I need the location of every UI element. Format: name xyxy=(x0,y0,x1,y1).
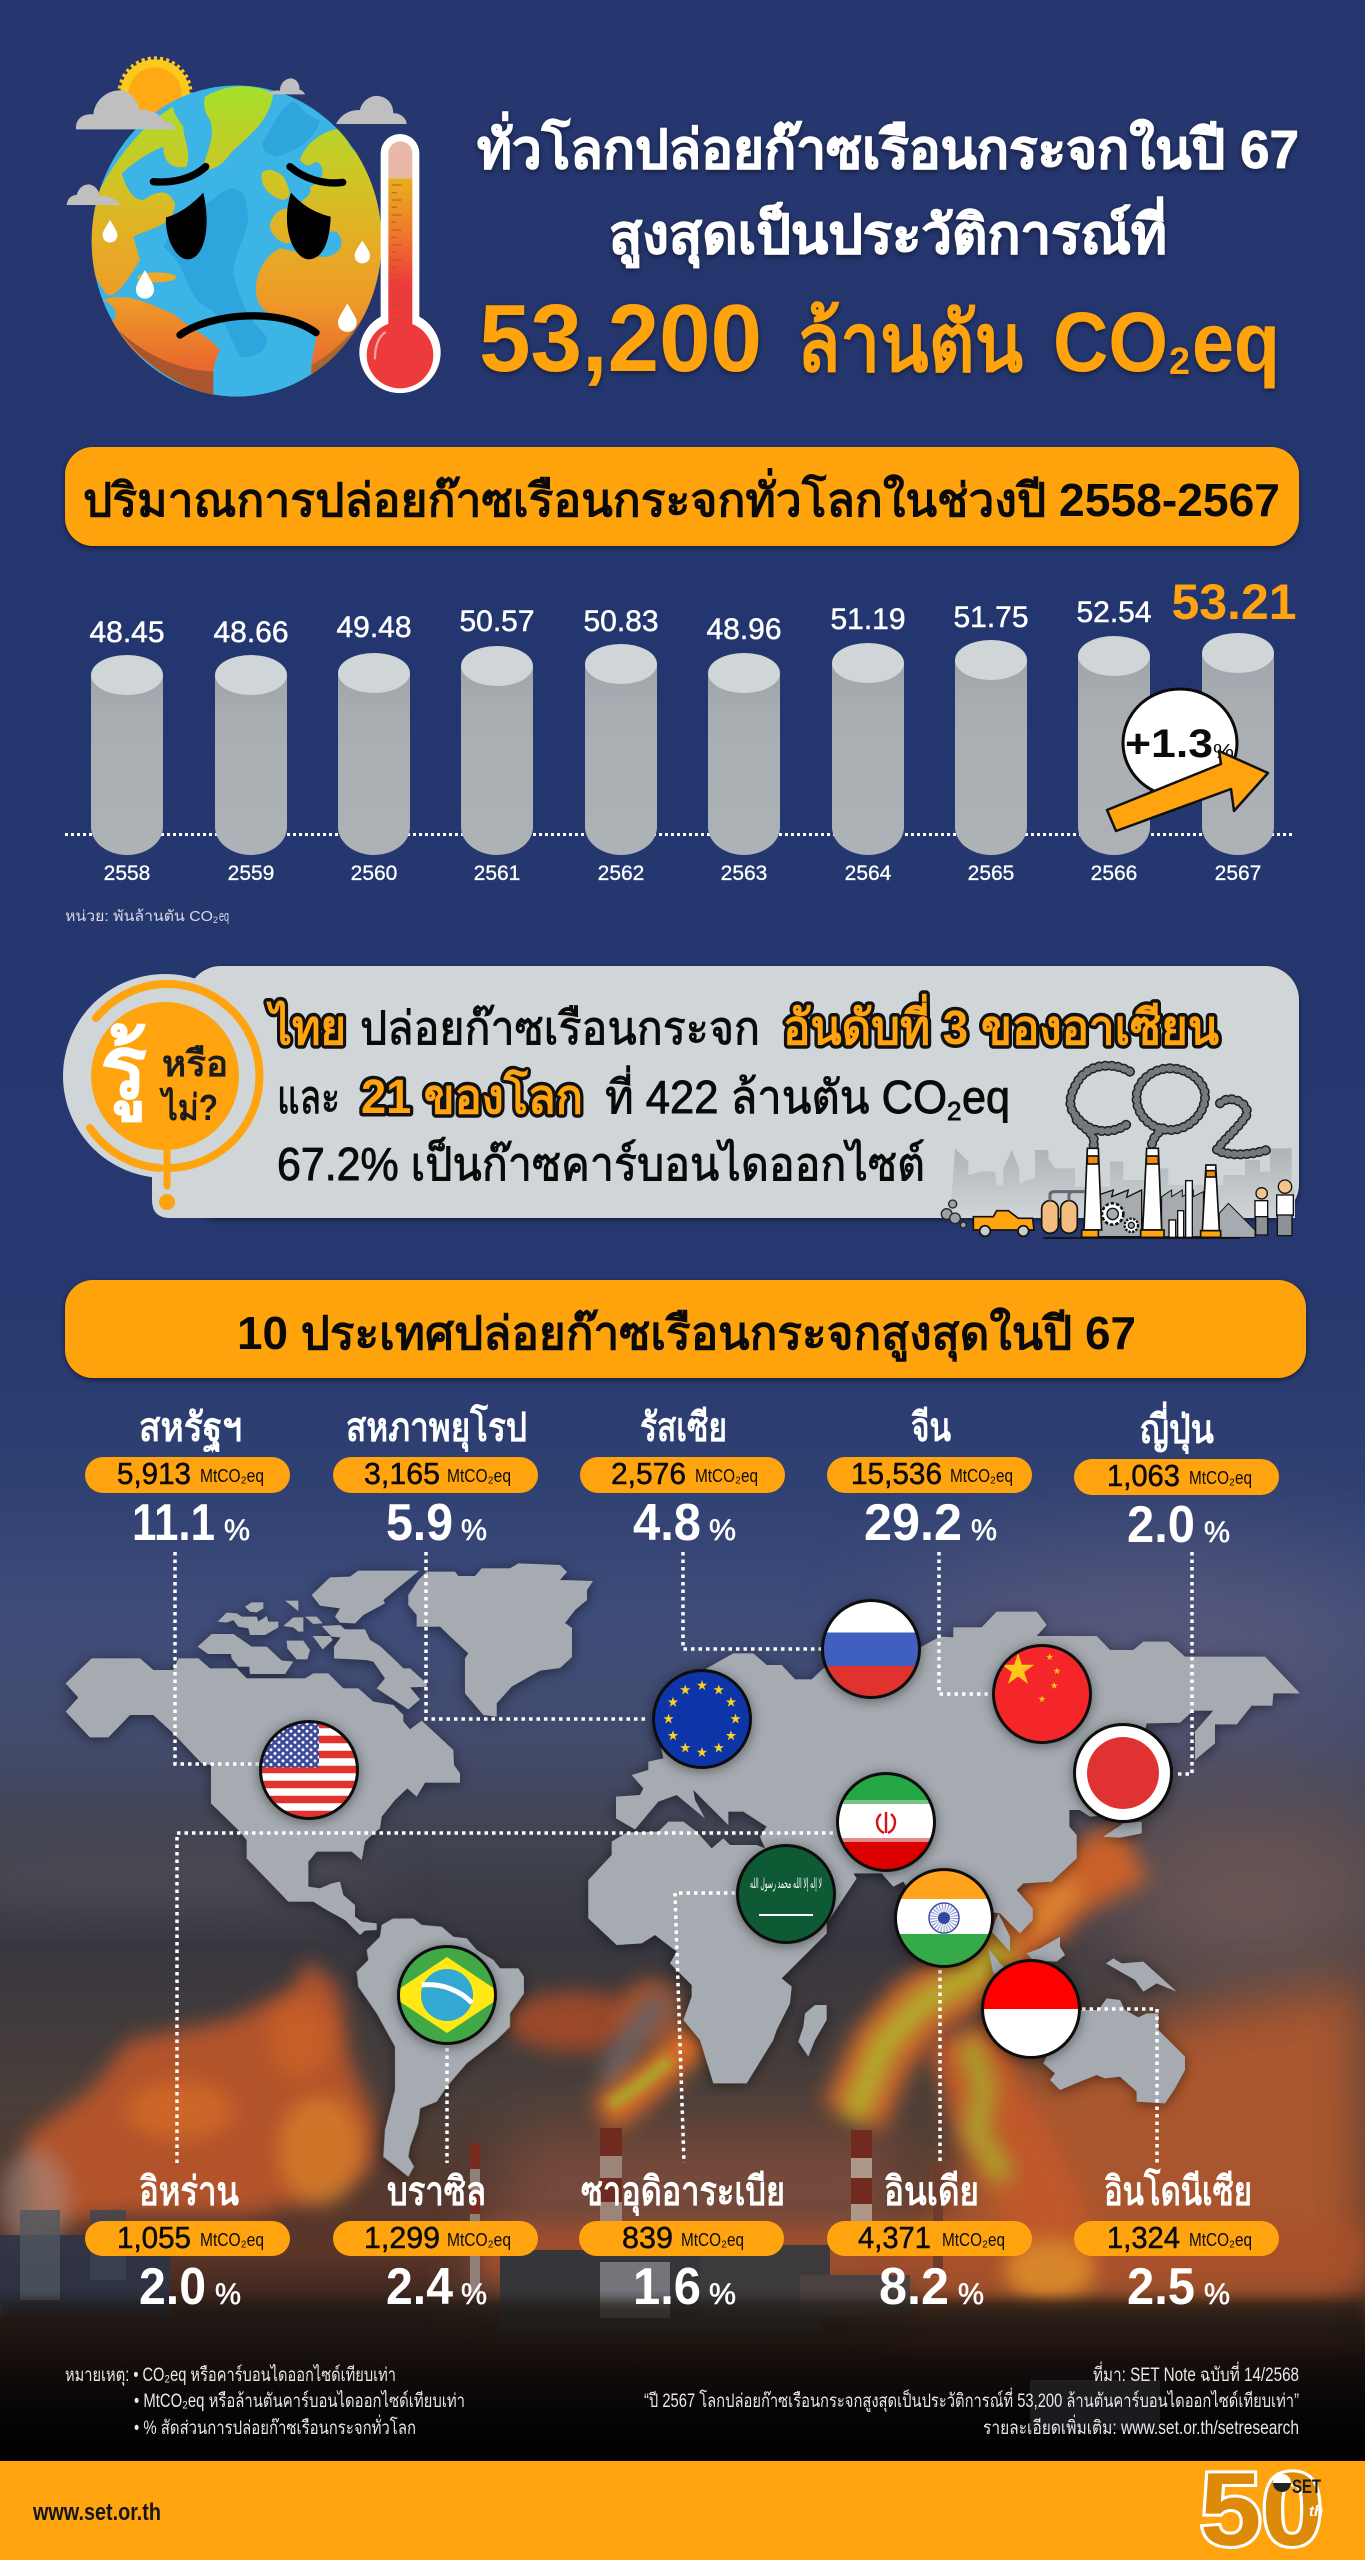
flag: Brazil xyxy=(397,1945,497,2045)
icon: sad earth with sun, clouds and thermometer xyxy=(67,59,441,397)
headline figure: 53,200 million tons CO2eq xyxy=(479,285,1280,392)
country: European Union: สหภาพยุโรป xyxy=(346,1404,527,1453)
text: Thailand ranking xyxy=(265,993,1219,1190)
text: Thailand ranking: ปล่อยก๊าซเรือนกระจก xyxy=(360,1002,760,1054)
country: United States: MtCO₂eq xyxy=(200,1466,264,1486)
country: India: % xyxy=(958,2278,984,2311)
country: European Union: 5.9 xyxy=(386,1494,453,1552)
bar chart: global emissions by year xyxy=(65,574,1297,885)
map: Australia xyxy=(1043,1998,1185,2103)
country: Brazil: % xyxy=(461,2278,487,2311)
country: Iran: 2.0 xyxy=(139,2258,206,2316)
flag: China xyxy=(994,1646,1090,1742)
notes: definitions: • % สัดส่วนการปล่อยก๊าซเรือนกระจกทั่วโลก xyxy=(134,2414,416,2439)
flag: Japan xyxy=(1074,1724,1172,1822)
chimneys and factory silhouettes in background photo xyxy=(0,2128,1365,2461)
map: North America and Greenland xyxy=(66,1563,593,1935)
flag: Indonesia xyxy=(981,1959,1081,2059)
country: United States: สหรัฐฯ xyxy=(139,1406,242,1454)
bar 2562: 2562 xyxy=(598,862,644,885)
flag: India xyxy=(894,1868,994,1968)
flag: United States xyxy=(259,1720,359,1820)
country: Iran: อิหร่าน xyxy=(139,2170,239,2214)
text: Thailand ranking: 2 xyxy=(947,1096,961,1126)
bar 2563: 2563 xyxy=(721,862,767,885)
world map xyxy=(66,1563,1300,2177)
flag: European Union xyxy=(654,1670,750,1768)
bar 2561: 2561 xyxy=(474,862,520,885)
country: European Union: % xyxy=(461,1514,487,1547)
text: Thailand ranking: eq xyxy=(962,1071,1010,1123)
dotted leader lines xyxy=(175,1552,1192,2163)
country: Japan xyxy=(1074,1401,1279,1554)
country: Indonesia: 1,324 xyxy=(1107,2220,1180,2255)
country: European Union: 3,165 xyxy=(364,1456,440,1491)
country: Indonesia xyxy=(1074,2168,1279,2316)
flag: Iran xyxy=(836,1772,936,1872)
country: United States xyxy=(85,1406,290,1552)
bar 2567: 53.21 xyxy=(1171,574,1297,630)
country: Russia: รัสเซีย xyxy=(640,1406,727,1450)
bar 2561 xyxy=(459,605,535,885)
icon: sad face xyxy=(103,167,370,335)
notes: source xyxy=(644,2361,1299,2439)
country: Japan: % xyxy=(1204,1516,1230,1549)
country: India: อินเดีย xyxy=(884,2170,979,2214)
bar 2566: 2566 xyxy=(1091,862,1137,885)
text: Thailand ranking: ไทย xyxy=(265,999,346,1055)
country: India xyxy=(827,2170,1032,2316)
country: United States: 5,913 xyxy=(117,1456,191,1491)
bar 2564 xyxy=(830,603,906,885)
text: Thailand ranking: ที่ 422 ล้านตัน CO xyxy=(605,1065,947,1123)
text: Thailand ranking: อันดับที่ 3 ของอาเซียน xyxy=(783,993,1219,1055)
country: Indonesia: อินโดนีเซีย xyxy=(1104,2168,1252,2214)
map: Asia-Pacific islands xyxy=(988,1822,1177,1992)
country: Russia xyxy=(580,1406,785,1552)
bar 2560: 2560 xyxy=(351,862,397,885)
unit note: eq xyxy=(219,908,229,925)
map: Eurasia and Africa xyxy=(588,1612,1300,2083)
unit note: 2 xyxy=(213,915,218,925)
country: Japan: MtCO₂eq xyxy=(1189,1468,1252,1488)
icon: factory with CO2 smoke xyxy=(941,1066,1295,1238)
country: Russia: 2,576 xyxy=(611,1456,686,1491)
bar 2559: 48.66 xyxy=(213,616,289,649)
icon: thermometer xyxy=(359,134,441,393)
notes: source: ที่มา: SET Note ฉบับที่ 14/2568 xyxy=(1093,2361,1299,2386)
country: Iran: % xyxy=(215,2278,241,2311)
badge: did you know magnifier bubble: หรือ xyxy=(162,1043,228,1084)
footer bar xyxy=(0,2452,1365,2560)
logo: SET 50th: SET xyxy=(1292,2477,1321,2498)
panel: did you know xyxy=(63,966,1299,1238)
people xyxy=(1255,1180,1293,1236)
notes: definitions xyxy=(65,2364,465,2439)
country: China: 29.2 xyxy=(864,1494,962,1552)
bar 2560 xyxy=(336,611,412,885)
country: China: 15,536 xyxy=(851,1456,942,1491)
heading bar: global emissions 2558-2567 xyxy=(65,447,1299,546)
logo: SET 50th: th xyxy=(1309,2503,1323,2520)
badge: did you know magnifier bubble xyxy=(63,974,267,1218)
arrow: upward trend xyxy=(1107,751,1268,831)
country: China: MtCO₂eq xyxy=(950,1466,1013,1486)
notes: definitions: หมายเหตุ: • CO₂eq หรือคาร์บอนไดออกไซด์เทียบเท่า xyxy=(65,2364,396,2387)
bar 2565: 2565 xyxy=(968,862,1014,885)
country: Japan: 1,063 xyxy=(1107,1458,1180,1493)
car smoke xyxy=(941,1200,966,1228)
country: Brazil: บราซิล xyxy=(387,2170,486,2214)
heading bar: global emissions 2558-2567: ปริมาณการปล่อยก๊าซเรือนกระจกทั่วโลกในช่วงปี 2558-2567 xyxy=(83,468,1280,526)
headline figure: 53,200 million tons CO2eq: 53,200 xyxy=(479,285,762,392)
flag: Saudi Arabia xyxy=(738,1846,834,1942)
bar 2558: 2558 xyxy=(104,862,150,885)
bar 2559: 2559 xyxy=(228,862,274,885)
heading bar: top 10 emitters xyxy=(65,1280,1306,1378)
notes: definitions: • MtCO₂eq หรือล้านตันคาร์บอนไดออกไซด์เทียบเท่า xyxy=(134,2390,465,2412)
country: Saudi Arabia: % xyxy=(709,2278,736,2311)
callout: +1.3 percent growth: +1.3 xyxy=(1125,722,1213,766)
title xyxy=(477,111,1299,269)
country: Russia: % xyxy=(709,1514,736,1547)
headline figure: 53,200 million tons CO2eq: 2 xyxy=(1169,341,1190,383)
country: India: 8.2 xyxy=(879,2258,949,2316)
title line 1: ทั่วโลกปล่อยก๊าซเรือนกระจกในปี 67 xyxy=(477,111,1299,180)
bar 2564: 2564 xyxy=(845,862,892,885)
country: Iran: 1,055 xyxy=(117,2220,191,2255)
country: Iran: MtCO₂eq xyxy=(200,2230,264,2250)
icon: globe xyxy=(86,85,386,397)
country: Indonesia: MtCO₂eq xyxy=(1189,2230,1252,2250)
country: Brazil: 2.4 xyxy=(386,2258,453,2316)
callout: +1.3 percent growth: % xyxy=(1213,741,1234,763)
heading bar: top 10 emitters: 10 ประเทศปล่อยก๊าซเรือนกระจกสูงสุดในปี 67 xyxy=(237,1306,1136,1362)
country: India: MtCO₂eq xyxy=(942,2230,1005,2250)
country: Brazil: 1,299 xyxy=(364,2220,440,2255)
bar 2566: 52.54 xyxy=(1076,596,1152,629)
country: Japan: 2.0 xyxy=(1127,1496,1195,1554)
country: European Union: MtCO₂eq xyxy=(447,1466,511,1486)
bar 2567 xyxy=(1171,574,1297,885)
map: South America xyxy=(357,1918,524,2177)
bar 2559 xyxy=(213,616,289,885)
panel background xyxy=(187,966,1299,1218)
country: Saudi Arabia: 839 xyxy=(622,2220,673,2255)
bar 2564: 51.19 xyxy=(830,603,906,636)
country: China: % xyxy=(971,1514,997,1547)
headline figure: 53,200 million tons CO2eq: CO xyxy=(1053,295,1168,389)
country: United States: % xyxy=(224,1514,250,1547)
car xyxy=(973,1211,1034,1236)
country: United States: 11.1 xyxy=(132,1494,215,1552)
country: Brazil xyxy=(333,2170,538,2316)
country: China xyxy=(827,1406,1032,1552)
bar 2563 xyxy=(706,613,782,885)
badge: did you know magnifier bubble: รู้ xyxy=(100,1018,147,1123)
title line 2: สูงสุดเป็นประวัติการณ์ที่ xyxy=(609,196,1167,269)
icon: sun xyxy=(120,59,190,129)
tanks xyxy=(1042,1192,1085,1233)
bar 2567: 2567 xyxy=(1215,862,1261,885)
country: European Union xyxy=(333,1404,538,1552)
notes: source: รายละเอียดเพิ่มเติม: www.set.or.th/setresearch xyxy=(983,2414,1299,2439)
bar 2563: 48.96 xyxy=(706,613,782,646)
bar 2565: 51.75 xyxy=(953,601,1029,634)
icon: clouds xyxy=(67,78,407,205)
text: Thailand ranking: 67.2% เป็นก๊าซคาร์บอนไดออกไซต์ xyxy=(277,1137,925,1190)
text: Thailand ranking: และ xyxy=(277,1071,340,1123)
flag: Saudi Arabia: لا إله إلا الله محمد رسول الله xyxy=(750,1875,822,1892)
bar 2565 xyxy=(953,601,1029,885)
country: Iran xyxy=(85,2170,290,2316)
country: Russia: 4.8 xyxy=(633,1494,701,1552)
country: Japan: ญี่ปุ่น xyxy=(1140,1401,1214,1455)
bar 2566 xyxy=(1076,596,1152,885)
country: India: 4,371 xyxy=(858,2220,931,2255)
flag: Russia xyxy=(821,1599,921,1699)
country: China: จีน xyxy=(911,1406,951,1450)
callout: +1.3 percent growth xyxy=(1123,689,1237,797)
chimneys xyxy=(1082,1148,1221,1237)
country: Indonesia: % xyxy=(1204,2278,1230,2311)
bar 2562 xyxy=(583,605,659,885)
country: Saudi Arabia: MtCO₂eq xyxy=(681,2230,744,2250)
country: Indonesia: 2.5 xyxy=(1127,2258,1195,2316)
text: Thailand ranking: 21 ของโลก xyxy=(361,1068,583,1124)
country: Brazil: MtCO₂eq xyxy=(447,2230,511,2250)
country: Saudi Arabia: 1.6 xyxy=(633,2258,701,2316)
country: Russia: MtCO₂eq xyxy=(695,1466,758,1486)
footer website: www.set.or.th xyxy=(32,2499,161,2526)
badge: did you know magnifier bubble: ไม่? xyxy=(158,1086,218,1128)
unit note: หน่วย: พันล้านตัน CO xyxy=(65,908,213,925)
bar 2558 xyxy=(89,616,165,885)
country: Saudi Arabia: ซาอุดิอาระเบีย xyxy=(581,2170,785,2217)
country: Saudi Arabia xyxy=(579,2170,785,2316)
headline figure: 53,200 million tons CO2eq: ล้านตัน xyxy=(797,298,1023,389)
bar 2560: 49.48 xyxy=(336,611,412,644)
bar 2562: 50.83 xyxy=(583,605,659,638)
bar 2558: 48.45 xyxy=(89,616,165,649)
headline figure: 53,200 million tons CO2eq: eq xyxy=(1192,295,1280,389)
bar 2561: 50.57 xyxy=(459,605,535,638)
